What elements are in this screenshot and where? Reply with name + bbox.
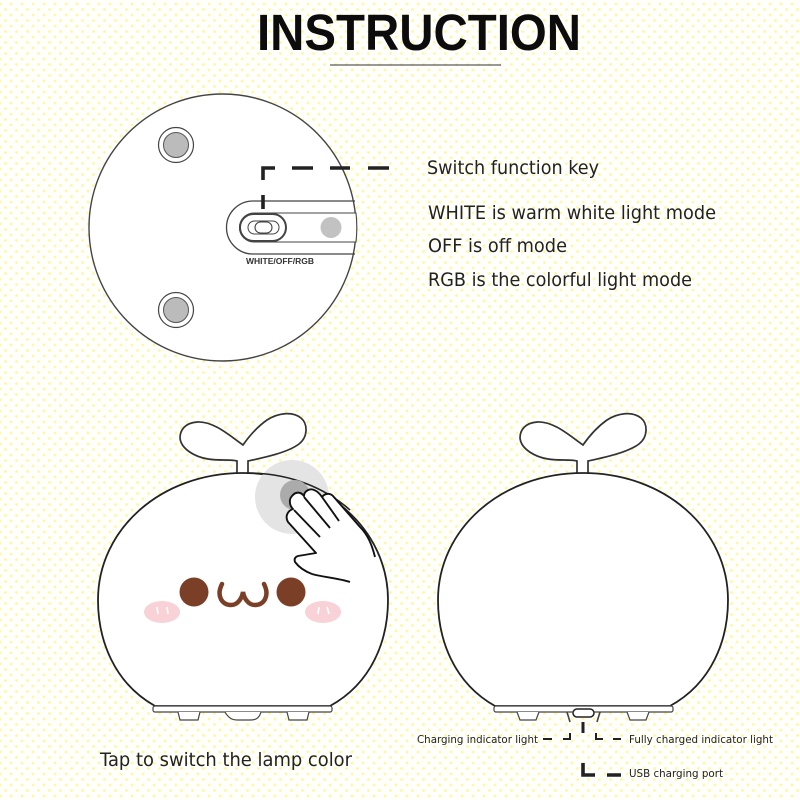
dashed leader: switch function key (263, 168, 389, 209)
lamp body (98, 473, 388, 706)
text: switch function key: Switch function key (427, 157, 599, 179)
switch slot (226, 201, 357, 254)
icon: sprout (180, 414, 306, 476)
icon: eyes (180, 578, 306, 606)
dashed leaders: ports (543, 722, 621, 775)
icon: cheeks (144, 601, 341, 623)
text: port labels: USB charging port (629, 767, 724, 780)
lamp body (438, 473, 728, 706)
switch panel: lamp underside (89, 94, 357, 361)
text: switch modes: OFF is off mode (428, 235, 567, 257)
icon: lower rubber foot (158, 292, 194, 328)
icon: mouth (220, 584, 266, 605)
left lamp: face and touch (98, 414, 388, 720)
icon: upper rubber foot (158, 128, 194, 162)
touch glow (247, 460, 350, 534)
lamp base (494, 706, 673, 722)
right lamp: back view (438, 414, 728, 722)
text: port labels: Charging indicator light (417, 733, 539, 746)
lamp base (153, 706, 332, 720)
text: port labels: Fully charged indicator light (629, 733, 774, 746)
switch label: WHITE/OFF/RGB (246, 257, 314, 266)
icon: hand (287, 489, 377, 600)
title: INSTRUCTION (257, 4, 581, 61)
text: tap caption: Tap to switch the lamp color (99, 749, 352, 771)
text: switch modes (428, 202, 716, 291)
text: port labels (417, 733, 774, 780)
icon: sprout (520, 414, 646, 476)
text: switch modes: RGB is the colorful light mode (428, 269, 692, 291)
text: switch modes: WHITE is warm white light mode (428, 202, 716, 224)
